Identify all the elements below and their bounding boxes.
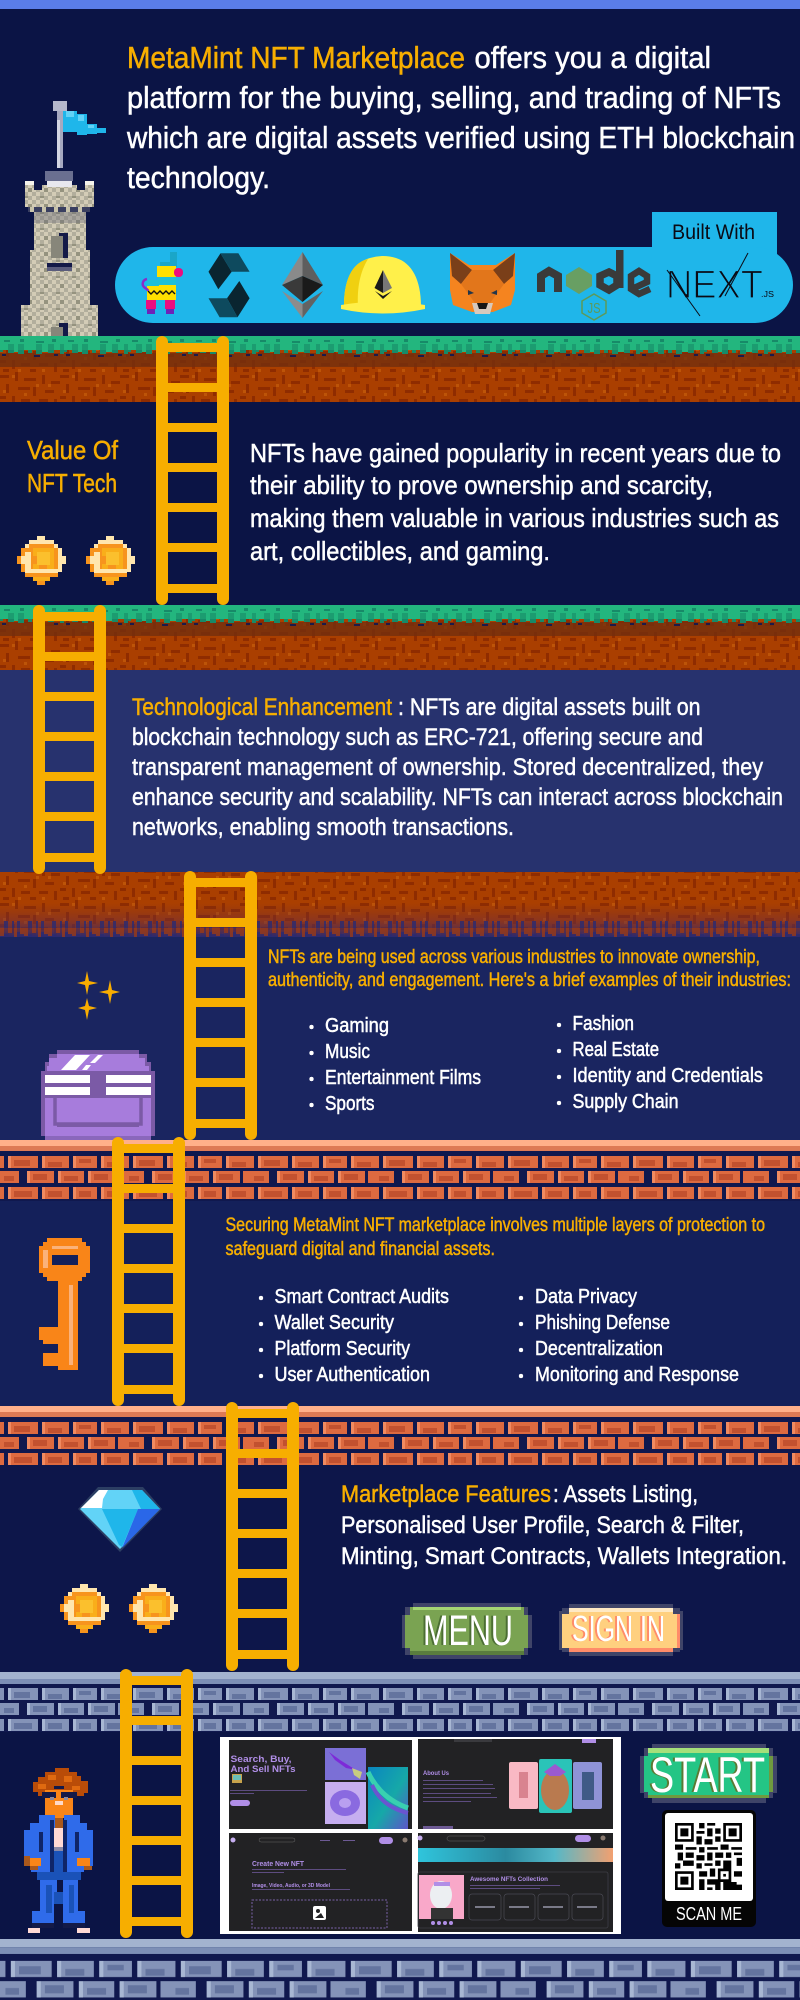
ground platform 2: [0, 605, 800, 670]
panel: website screenshots collage: [220, 1737, 621, 1934]
text: technological enhancement paragraph: Technological Enhancement: [132, 694, 392, 721]
ladder 3: [184, 871, 257, 1140]
icon: pixel character in blue coat: [24, 1768, 93, 1933]
text: value of nfts paragraph: their ability to prove ownership and scarcity,: [250, 470, 713, 500]
qr code modules: [675, 1823, 742, 1890]
screenshot: about us: [418, 1739, 613, 1829]
icon: node js: [541, 250, 650, 320]
list: security right: Decentralization: [535, 1338, 663, 1360]
title: offers you a digital: [474, 40, 711, 75]
icon: diamond: [78, 1487, 162, 1552]
icon: orange key: [39, 1238, 90, 1370]
heading: value of nft tech: NFT Tech: [27, 468, 117, 498]
icon: ethereum: [282, 252, 323, 318]
icon: coin right: [86, 536, 135, 585]
screenshot: awesome nfts collection: Awesome NFTs Collection: [470, 1876, 548, 1883]
text: technological enhancement paragraph: [132, 694, 783, 841]
title: [126, 40, 795, 195]
list: industries left: Music: [325, 1041, 370, 1063]
screenshot: create new nft: Create New NFT: [252, 1861, 305, 1868]
ladder 1: [156, 336, 229, 605]
button: menu: [402, 1603, 532, 1659]
panel: section 2 background: [0, 670, 800, 872]
text: marketplace features: Marketplace Features: [341, 1481, 551, 1508]
panel: technology logo pill: [115, 247, 793, 323]
screenshot: awesome nfts collection: [418, 1833, 613, 1932]
qr code with scan me label: SCAN ME: [676, 1904, 742, 1924]
text: marketplace features: Personalised User Profile, Search & Filter,: [341, 1512, 744, 1539]
screenshot: hero search buy sell: Search, Buy,: [230, 1754, 292, 1765]
stone platform 1: [0, 1672, 800, 1732]
icon: node js: JS: [588, 300, 600, 317]
screenshot: create new nft: [229, 1833, 412, 1931]
panel: section 3 background: [0, 937, 800, 1140]
icon: coin left: [60, 1584, 109, 1633]
text: value of nfts paragraph: [250, 438, 781, 566]
panel: section 4 background: [0, 1201, 800, 1406]
list: security right: Phishing Defense: [535, 1312, 670, 1334]
text: industries intro: [268, 947, 791, 991]
list: industries right: Supply Chain: [572, 1091, 678, 1113]
brick platform 1: [0, 1140, 800, 1201]
heading: value of nft tech: [27, 435, 119, 498]
list: industries left: Gaming: [325, 1015, 389, 1037]
icon: sparkles: [77, 971, 120, 1020]
list: industries right: Identity and Credentials: [572, 1065, 763, 1087]
list: security right: Monitoring and Response: [535, 1364, 739, 1386]
button: menu: MENU: [423, 1607, 513, 1655]
top accent bar: [0, 0, 800, 9]
icon: hardhat helmet: [341, 256, 425, 314]
ladder 5: [226, 1402, 299, 1671]
list: industries left: Sports: [325, 1093, 374, 1115]
list: industries left: [310, 1015, 481, 1115]
icon: coin left: [17, 536, 66, 585]
list: industries right: Fashion: [572, 1013, 634, 1035]
text: security intro: safeguard digital and financial assets.: [226, 1239, 495, 1260]
qr code with scan me label: [662, 1810, 756, 1927]
icon: next js: [666, 253, 774, 316]
text: technological enhancement paragraph: : NFTs are digital assets built on: [398, 694, 700, 721]
screenshot: hero search buy sell: And Sell NFTs: [230, 1764, 296, 1775]
stone platform 2: [0, 1939, 800, 2000]
list: security left: [259, 1286, 449, 1386]
ladder 4: [112, 1137, 185, 1406]
screenshot: about us: About Us: [423, 1770, 449, 1777]
icon: metamask fox: [450, 253, 515, 314]
text: security intro: [226, 1215, 765, 1260]
list: security left: Platform Security: [274, 1338, 410, 1360]
panel: section 5 background: [0, 1465, 800, 1672]
icon: next js: NEXT: [666, 263, 763, 307]
list: security left: User Authentication: [274, 1364, 430, 1386]
text: technological enhancement paragraph: blockchain technology such as ERC-721, offering secure and: [132, 724, 703, 751]
icon: next js: .JS: [761, 290, 774, 299]
list: security right: [519, 1286, 739, 1386]
built with tab: [652, 212, 777, 257]
list: industries right: [557, 1013, 763, 1113]
icon: solidity: [208, 253, 250, 317]
brick platform 2: [0, 1406, 800, 1465]
icon: castle tower with flag: [21, 101, 106, 336]
text: marketplace features: : Assets Listing,: [553, 1481, 698, 1508]
list: industries right: Real Estate: [572, 1039, 659, 1061]
screenshot: hero search buy sell: [229, 1740, 412, 1829]
title: technology.: [127, 160, 270, 195]
button: sign in: [559, 1604, 683, 1656]
list: security left: Wallet Security: [274, 1312, 394, 1334]
icon: coin right: [129, 1584, 178, 1633]
title: MetaMint NFT Marketplace: [127, 40, 465, 75]
text: technological enhancement paragraph: networks, enabling smooth transactions.: [132, 814, 514, 841]
icon: purple treasure chest: [41, 1050, 155, 1140]
list: security left: Smart Contract Audits: [274, 1286, 449, 1308]
text: marketplace features: [341, 1481, 787, 1570]
icon: llama pinata: [143, 252, 183, 314]
built with tab: Built With: [672, 221, 755, 244]
list: industries left: Entertainment Films: [325, 1067, 481, 1089]
text: value of nfts paragraph: art, collectibles, and gaming.: [250, 536, 550, 566]
dirt band fading to purple: [0, 872, 800, 937]
list: security right: Data Privacy: [535, 1286, 637, 1308]
button: sign in: SIGN IN: [572, 1608, 665, 1649]
heading: value of nft tech: Value Of: [27, 435, 119, 465]
ladder 6: [120, 1669, 193, 1938]
screenshot: create new nft: Image, Video, Audio, or 3D Model: [252, 1883, 330, 1889]
ground platform 1: [0, 336, 800, 402]
ladder 2: [33, 605, 106, 874]
